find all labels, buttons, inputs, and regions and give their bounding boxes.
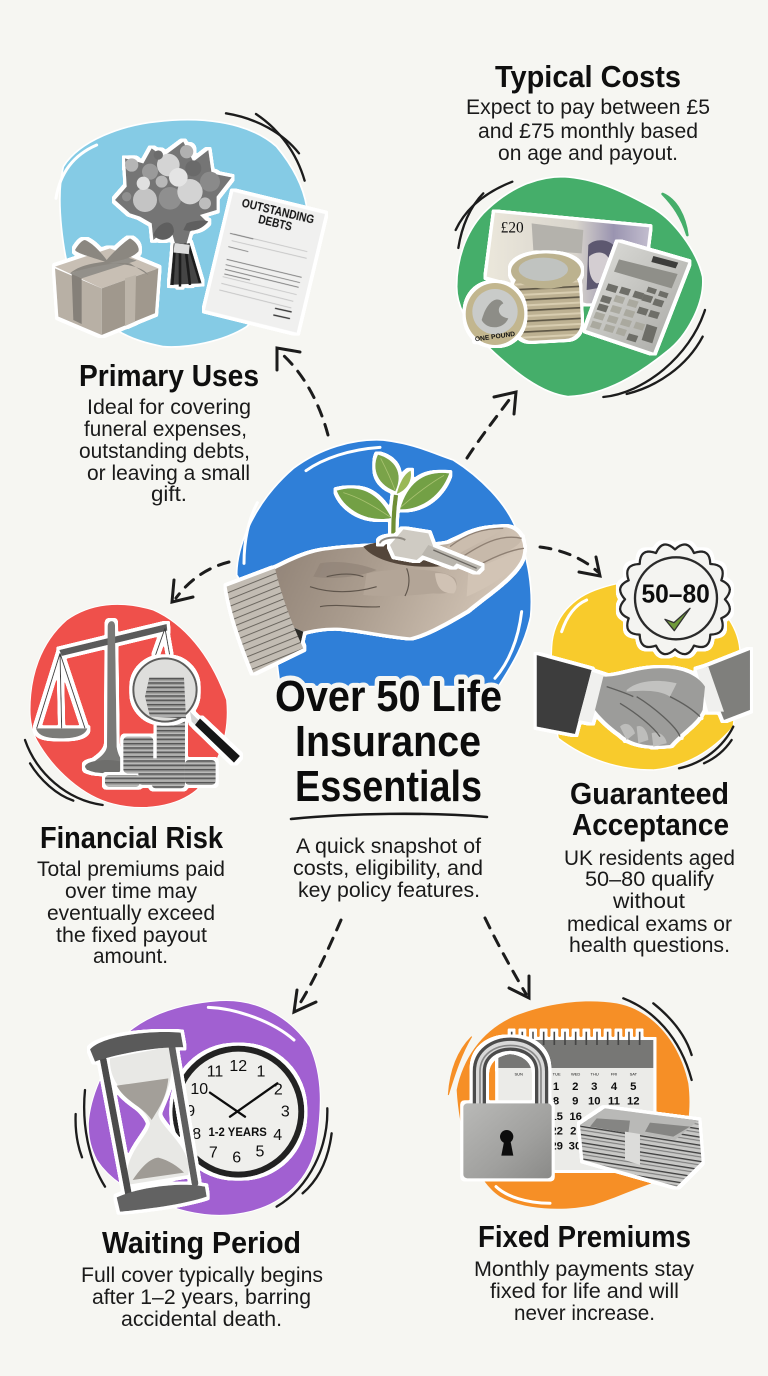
icon: wall clock: 11 — [207, 1064, 223, 1081]
text: fixed premiums body: Monthly payments stay — [474, 1258, 695, 1281]
icon: house key — [380, 529, 482, 572]
panel: financial risk — [25, 604, 240, 968]
text: typical costs body: and £75 monthly based — [478, 120, 698, 143]
arrow: to typical costs — [467, 392, 516, 458]
document heading: OUTSTANDING — [240, 196, 316, 227]
icon: soil mound — [363, 542, 455, 567]
icon: calendar: 4 — [611, 1081, 618, 1093]
text: waiting period body: after 1–2 years, barring — [92, 1286, 311, 1309]
green accent swoosh — [663, 194, 687, 235]
text: financial risk body — [37, 858, 225, 968]
text: guaranteed acceptance body: without — [612, 890, 685, 913]
highlights — [244, 447, 522, 678]
illustration: padlock, calendar and cash on orange blob — [448, 998, 702, 1209]
illustration: hourglass and clock on purple blob — [76, 1000, 332, 1215]
motion strokes — [679, 727, 733, 768]
heading: typical costs: Typical Costs — [495, 59, 681, 94]
icon: calendar: 3 — [591, 1081, 597, 1093]
icon: calendar: 16 — [569, 1111, 582, 1123]
icon: calendar: 29 — [550, 1141, 563, 1153]
subtitle: costs, eligibility, and — [293, 857, 483, 880]
text: fixed premiums body: never increase. — [514, 1302, 655, 1325]
icon: wall clock: 5 — [256, 1144, 265, 1161]
icon: calendar: 11 — [608, 1096, 620, 1108]
icon: calculator — [586, 242, 688, 353]
icon: calendar: 1 — [553, 1081, 559, 1093]
illustration: handshake and age badge on yellow blob — [537, 544, 750, 770]
arrow: to primary uses — [277, 348, 328, 435]
icon: 50-80 badge — [620, 544, 730, 654]
illustration: hand holding key and seedling on blue blob — [227, 440, 531, 687]
subtitle — [293, 835, 483, 902]
arrow: to financial risk — [172, 562, 229, 602]
icon: calendar: 5 — [630, 1081, 636, 1093]
icon: calendar: WED — [571, 1071, 580, 1076]
subtitle: A quick snapshot of — [296, 835, 481, 858]
illustration: banknote, coins and calculator on green blob — [456, 177, 705, 397]
text: fixed premiums body — [474, 1258, 695, 1325]
document heading — [238, 196, 316, 239]
icon: magnifying glass — [133, 658, 240, 763]
motion strokes — [76, 1090, 332, 1207]
sky blue blob — [60, 120, 307, 347]
arrow: to guaranteed acceptance — [540, 547, 600, 576]
icon: calendar: SAT — [630, 1071, 638, 1076]
heading: waiting period: Waiting Period — [102, 1225, 301, 1260]
text: primary uses body — [79, 396, 251, 506]
illustration: scales, magnifier and coins on red blob — [25, 604, 240, 807]
icon: wall clock: 10 — [190, 1081, 208, 1098]
text: guaranteed acceptance body — [564, 847, 735, 957]
red blob — [30, 604, 227, 807]
text: guaranteed acceptance body: 50–80 qualify — [585, 868, 715, 891]
title — [275, 672, 502, 811]
heading: primary uses: Primary Uses — [79, 358, 259, 393]
illustration: bouquet, gift box and document on sky blue blob — [55, 113, 325, 347]
heading: financial risk: Financial Risk — [40, 820, 224, 855]
text: guaranteed acceptance body: medical exams or — [567, 913, 732, 936]
panel: fixed premiums — [448, 998, 702, 1325]
icon: calendar: 22 — [550, 1126, 563, 1138]
document heading: DEBTS — [257, 212, 293, 234]
icon: calendar: 12 — [627, 1096, 640, 1108]
icon: calendar: FRI — [611, 1071, 617, 1076]
icon: calendar: 30 — [569, 1141, 581, 1153]
text: guaranteed acceptance body: UK residents aged — [564, 847, 735, 870]
heading: guaranteed acceptance — [570, 776, 729, 842]
text: fixed premiums body: fixed for life and will — [490, 1280, 679, 1303]
icon: hand and sleeve — [227, 527, 524, 673]
icon: cash stacks — [580, 1108, 702, 1187]
icon: wall clock: 12 — [229, 1058, 247, 1075]
highlight — [496, 1187, 550, 1203]
yellow blob — [551, 581, 740, 770]
icon: calendar: SUN — [514, 1071, 523, 1076]
icon: calendar — [498, 1032, 653, 1170]
icon: handshake — [537, 650, 750, 747]
icon: outstanding debts document — [205, 192, 325, 333]
text: financial risk body: the fixed payout — [56, 924, 207, 947]
icon: calendar: 2 — [572, 1081, 578, 1093]
panel: typical costs — [456, 59, 710, 397]
heading: guaranteed acceptance: Acceptance — [572, 807, 729, 842]
green blob — [457, 177, 703, 397]
icon: balance scale — [36, 621, 170, 773]
icon: twenty pound banknote: £20 — [501, 219, 524, 236]
icon: pound coin: ONE POUND — [475, 331, 516, 343]
icon: calendar: 2 — [570, 1126, 576, 1138]
text: financial risk body: Total premiums paid — [37, 858, 225, 881]
text: waiting period body — [81, 1264, 323, 1331]
icon: pound coin — [466, 283, 524, 345]
highlight swoosh — [56, 145, 97, 198]
icon: calendar: TUE — [553, 1071, 561, 1076]
icon: wall clock: 8 — [192, 1126, 201, 1143]
motion strokes — [623, 998, 692, 1080]
text: primary uses body: gift. — [151, 483, 187, 506]
icon: gift box — [55, 238, 158, 335]
highlight — [208, 1007, 294, 1040]
icon: hourglass — [90, 1032, 207, 1212]
highlight — [562, 600, 587, 632]
icon: wall clock: 6 — [232, 1150, 241, 1167]
arrow: to fixed premiums — [485, 918, 529, 998]
icon: wall clock: 9 — [186, 1103, 195, 1120]
arrow: to waiting period — [294, 920, 341, 1012]
motion strokes — [456, 182, 705, 397]
text: financial risk body: over time may — [65, 880, 197, 903]
icon: wall clock: 1 — [257, 1064, 266, 1081]
text: financial risk body: eventually exceed — [47, 902, 215, 925]
icon: calendar: 10 — [588, 1096, 601, 1108]
icon: padlock — [463, 1044, 552, 1178]
panel: central hero — [227, 440, 531, 902]
text: financial risk body: amount. — [93, 945, 168, 968]
text: typical costs body — [466, 96, 710, 165]
icon: wall clock: 2 — [274, 1081, 283, 1098]
text: primary uses body: outstanding debts, — [79, 440, 250, 463]
text: primary uses body: or leaving a small — [87, 462, 250, 485]
text: waiting period body: accidental death. — [121, 1308, 282, 1331]
icon: wall clock: 1-2 YEARS — [208, 1125, 267, 1139]
orange blob — [457, 1001, 689, 1209]
text: typical costs body: on age and payout. — [498, 142, 678, 165]
panel: guaranteed acceptance — [537, 544, 750, 957]
orange accent swoosh — [448, 1037, 472, 1095]
motion strokes — [25, 740, 103, 805]
purple blob — [88, 1000, 320, 1215]
blue blob — [237, 440, 531, 687]
icon: calendar: THU — [591, 1071, 599, 1076]
subtitle: key policy features. — [298, 879, 480, 902]
text: typical costs body: Expect to pay between £5 — [466, 96, 710, 119]
icon: wall clock: 4 — [273, 1127, 282, 1144]
text: primary uses body: funeral expenses, — [84, 418, 247, 441]
panel: primary uses — [55, 113, 325, 506]
icon: seedling — [337, 455, 449, 540]
icon: wall clock — [172, 1046, 304, 1178]
title: Essentials — [295, 762, 482, 811]
icon: calendar: 8 — [553, 1096, 559, 1108]
icon: coin stacks — [105, 722, 216, 788]
text: waiting period body: Full cover typically begins — [81, 1264, 323, 1287]
panel: waiting period — [76, 1000, 332, 1331]
text: primary uses body: Ideal for covering — [87, 396, 251, 419]
icon: calendar: 15 — [550, 1111, 563, 1123]
icon: flower bouquet — [115, 142, 232, 287]
heading: guaranteed acceptance: Guaranteed — [570, 776, 729, 811]
icon: 50-80 badge: 50–80 — [641, 579, 710, 609]
motion strokes — [226, 113, 305, 181]
text: guaranteed acceptance body: health questions. — [569, 934, 730, 957]
icon: twenty pound banknote — [487, 213, 649, 303]
icon: coin stack — [511, 253, 582, 342]
title: Insurance — [295, 717, 481, 766]
title: Over 50 Life — [275, 672, 502, 721]
icon: calendar: 9 — [572, 1096, 578, 1108]
icon: wall clock: 3 — [281, 1104, 290, 1121]
icon: wall clock: 7 — [209, 1145, 218, 1162]
heading: fixed premiums: Fixed Premiums — [478, 1219, 691, 1254]
